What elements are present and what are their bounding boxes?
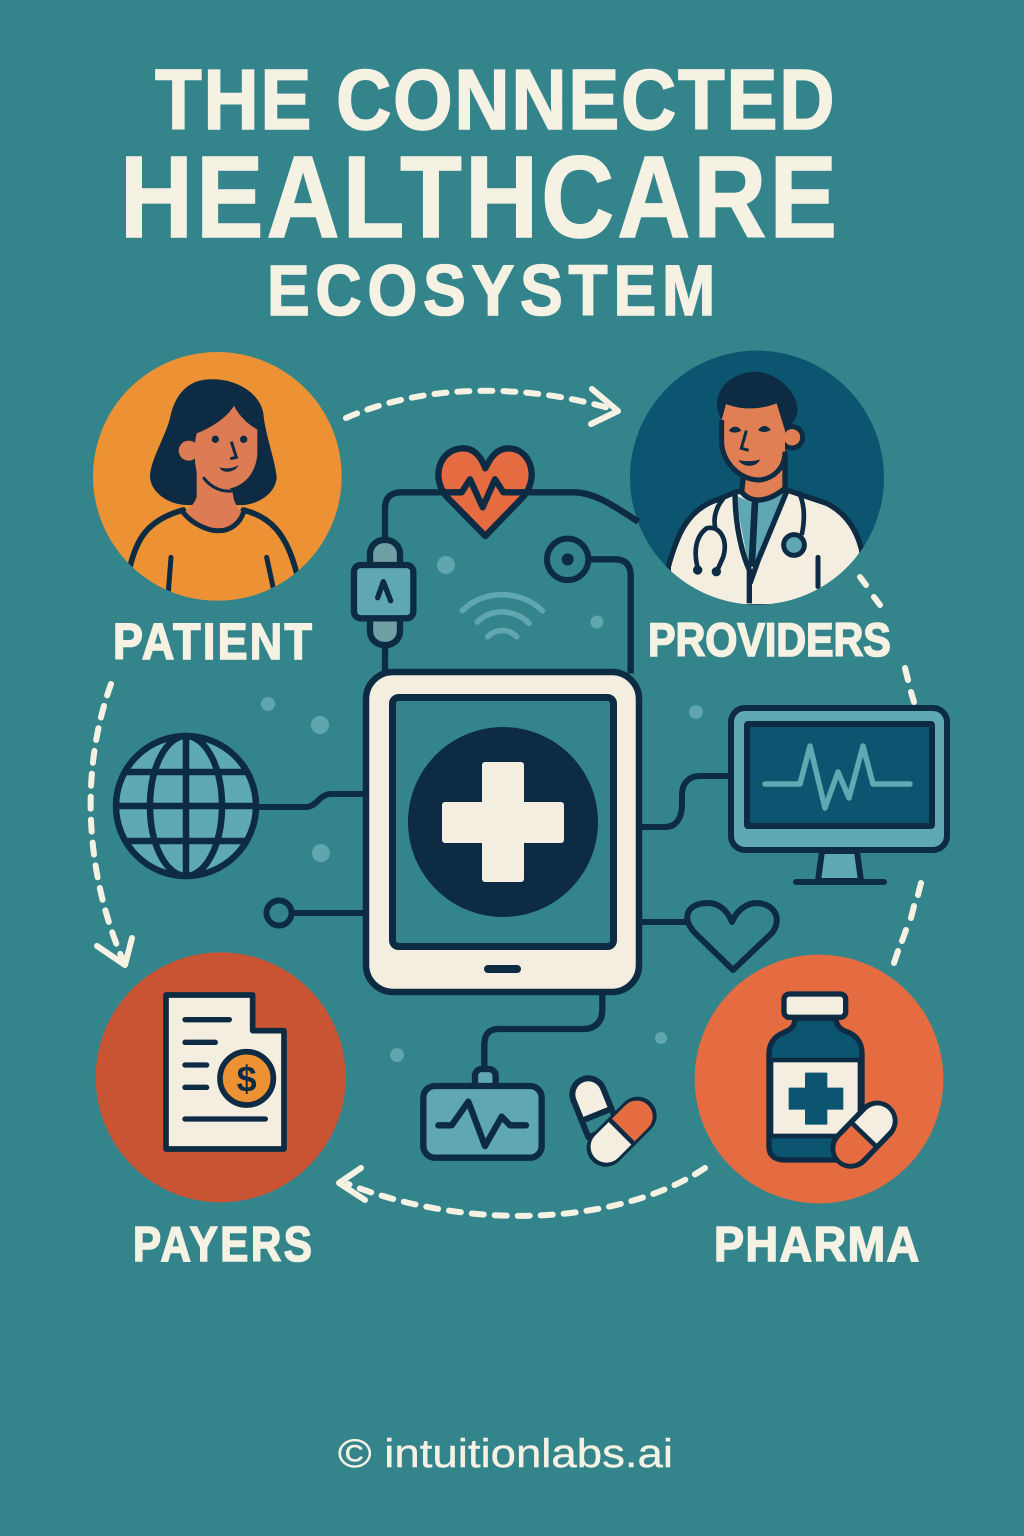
- title: HEALTHCARE: [120, 134, 837, 263]
- icon: pharma circle: [695, 955, 943, 1203]
- title: ECOSYSTEM: [267, 252, 715, 331]
- icon: stethoscope head: [547, 539, 588, 580]
- icon: monitor: [731, 708, 947, 882]
- icon: central tablet: [366, 672, 639, 992]
- icon: patient circle: [93, 352, 342, 607]
- connectors: [258, 776, 731, 922]
- icon: pills: [568, 1074, 665, 1175]
- icon: wifi: [462, 595, 542, 637]
- label: patient: PATIENT: [113, 614, 312, 671]
- icon: vital signs device: [423, 1069, 542, 1158]
- dashed arrow: pharma to payers: [339, 1168, 705, 1216]
- dashed arrow: providers to pharma: [860, 577, 921, 963]
- title: [120, 53, 837, 331]
- icon: plug: [354, 540, 413, 645]
- footer credit: © intuitionlabs.ai: [338, 1432, 673, 1476]
- icon: payers circle: $: [237, 1058, 257, 1099]
- icon: outline heart: [687, 903, 777, 970]
- icon: providers circle: [630, 351, 884, 607]
- icon: globe: [116, 736, 256, 876]
- dashed arrow: patient to providers: [346, 389, 618, 424]
- icon: payers circle: [96, 952, 346, 1202]
- bottom cable, device and pills: [423, 995, 665, 1175]
- top cables and heart: [354, 448, 638, 673]
- icon: heart with pulse: [438, 448, 532, 536]
- icon: node circle: [266, 900, 292, 926]
- label: providers: PROVIDERS: [648, 615, 891, 667]
- label: payers: PAYERS: [133, 1217, 312, 1272]
- label: pharma: PHARMA: [714, 1216, 919, 1271]
- dashed arrow: payers to patient: [91, 684, 132, 965]
- background dots: [261, 556, 703, 1062]
- title: THE CONNECTED: [155, 53, 835, 148]
